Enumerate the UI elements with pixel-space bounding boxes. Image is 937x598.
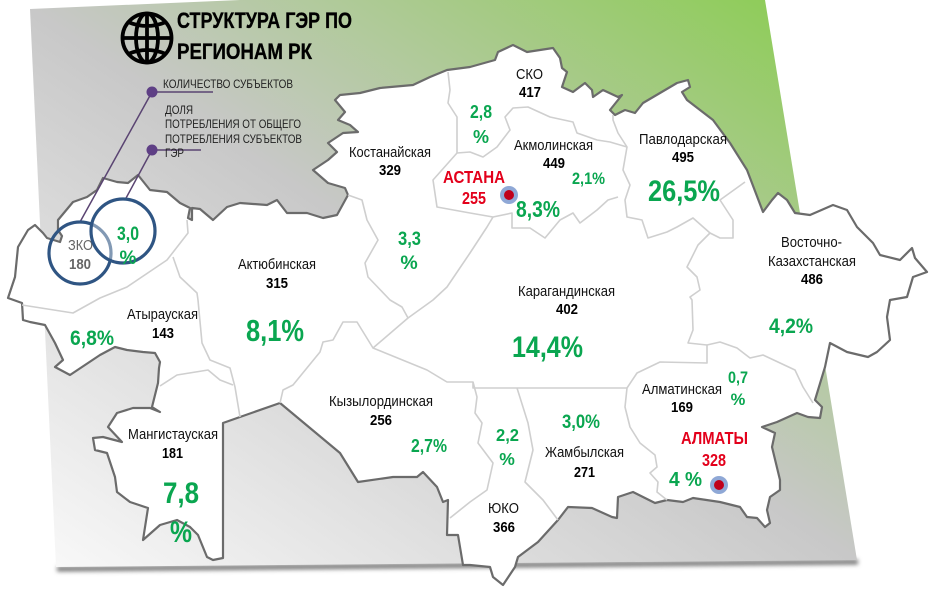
region: ЮКО: 2,2: [496, 425, 519, 445]
region: Карагандинская: 402: [556, 302, 578, 318]
region: Мангистауская: 181: [162, 446, 183, 462]
legend: consumption share: ПОТРЕБЛЕНИЯ ОТ ОБЩЕГО: [165, 117, 301, 131]
region: ЗКО: %: [120, 248, 137, 269]
region: Мангистауская: [128, 426, 218, 549]
region: Павлодарская: [639, 131, 727, 208]
region: ЮКО: [488, 425, 519, 536]
region: Актюбинская: 315: [266, 276, 288, 292]
region: Мангистауская: 7,8: [163, 477, 199, 510]
region: Костанайская: %: [400, 252, 418, 274]
city: Алматы: [669, 428, 748, 494]
region: Кызылординская: [329, 393, 447, 456]
region: Карагандинская: Карагандинская: [518, 283, 615, 300]
legend: number of entities: [80, 77, 293, 222]
region: ЗКО: 180: [69, 257, 91, 273]
legend: consumption share: [125, 103, 302, 200]
region: Актюбинская: [238, 256, 316, 348]
region: Атырауская: 143: [152, 326, 174, 342]
region: Мангистауская: Мангистауская: [128, 426, 218, 443]
city: Астана: 8,3%: [516, 196, 560, 222]
region: Костанайская: 329: [379, 163, 401, 179]
legend: consumption share: ПОТРЕБЛЕНИЯ СУБЪЕКТОВ: [165, 132, 302, 146]
title: РЕГИОНАМ РК: [177, 39, 312, 64]
city: Алматы: 328: [702, 450, 726, 470]
region: Алматинская: [642, 369, 748, 416]
legend: number of entities: КОЛИЧЕСТВО СУБЪЕКТОВ: [163, 77, 293, 91]
region: СКО: СКО: [516, 66, 543, 83]
region: Жамбылская: Жамбылская: [545, 444, 624, 461]
region: ЗКО: 3,0: [117, 224, 139, 245]
region borders: [22, 72, 813, 520]
title: [177, 8, 352, 64]
region: Восточно-Казахстанская: 486: [801, 272, 823, 288]
region: Акмолинская: 2,1%: [572, 169, 605, 188]
region: СКО: [470, 66, 543, 147]
region: Восточно-Казахстанская: 4,2%: [769, 315, 813, 338]
region: Жамбылская: [545, 412, 624, 481]
region: СКО: %: [473, 127, 489, 147]
region: Атырауская: [70, 306, 198, 350]
region: ЗКО: [49, 199, 155, 284]
region: Алматинская: 169: [671, 400, 693, 416]
region: Атырауская: Атырауская: [127, 306, 198, 323]
legend: consumption share: ГЭР: [165, 146, 184, 160]
region: Акмолинская: [514, 137, 605, 188]
city: Астана: [443, 167, 560, 222]
region: ЮКО: %: [499, 449, 515, 469]
region: Мангистауская: %: [170, 516, 192, 549]
region: ЮКО: ЮКО: [488, 500, 519, 517]
region: Актюбинская: Актюбинская: [238, 256, 316, 273]
region: Костанайская: 3,3: [398, 228, 421, 250]
region: Восточно-Казахстанская: Восточно-: [781, 234, 842, 251]
region: Акмолинская: 449: [543, 156, 565, 172]
region: Атырауская: 6,8%: [70, 327, 114, 350]
icon: globe: [122, 13, 172, 63]
region: Павлодарская: 495: [672, 150, 694, 166]
region: Алматинская: 0,7: [728, 369, 748, 387]
region: Карагандинская: [512, 283, 615, 364]
region: Карагандинская: 14,4%: [512, 331, 583, 364]
region: СКО: 417: [519, 85, 541, 101]
legend: [80, 77, 302, 222]
region: ЗКО: ЗКО: [68, 237, 93, 254]
region: Костанайская: [349, 144, 431, 274]
region: Актюбинская: 8,1%: [246, 313, 304, 348]
region: Кызылординская: Кызылординская: [329, 393, 433, 410]
region: ЮКО: 366: [493, 520, 515, 536]
legend: consumption share: ДОЛЯ: [165, 103, 193, 117]
region: Кызылординская: 2,7%: [411, 436, 447, 456]
region: СКО: 2,8: [470, 102, 492, 122]
region: Акмолинская: Акмолинская: [514, 137, 593, 154]
region: Жамбылская: 3,0%: [562, 412, 600, 433]
city: Алматы: 4 %: [669, 468, 702, 491]
region: Кызылординская: 256: [370, 413, 392, 429]
region: Алматинская: Алматинская: [642, 381, 722, 398]
region: Павлодарская: 26,5%: [648, 175, 720, 208]
region: Жамбылская: 271: [574, 465, 595, 481]
city: Алматы: АЛМАТЫ: [681, 428, 748, 448]
region: Восточно-Казахстанская: Казахстанская: [768, 253, 856, 270]
region: Костанайская: Костанайская: [349, 144, 431, 161]
region: Восточно-Казахстанская: [768, 234, 856, 338]
city: Астана: 255: [462, 188, 486, 208]
city: Астана: АСТАНА: [443, 167, 505, 187]
region: Алматинская: %: [731, 391, 746, 409]
region: Павлодарская: Павлодарская: [639, 131, 727, 148]
title: СТРУКТУРА ГЭР ПО: [177, 8, 352, 33]
